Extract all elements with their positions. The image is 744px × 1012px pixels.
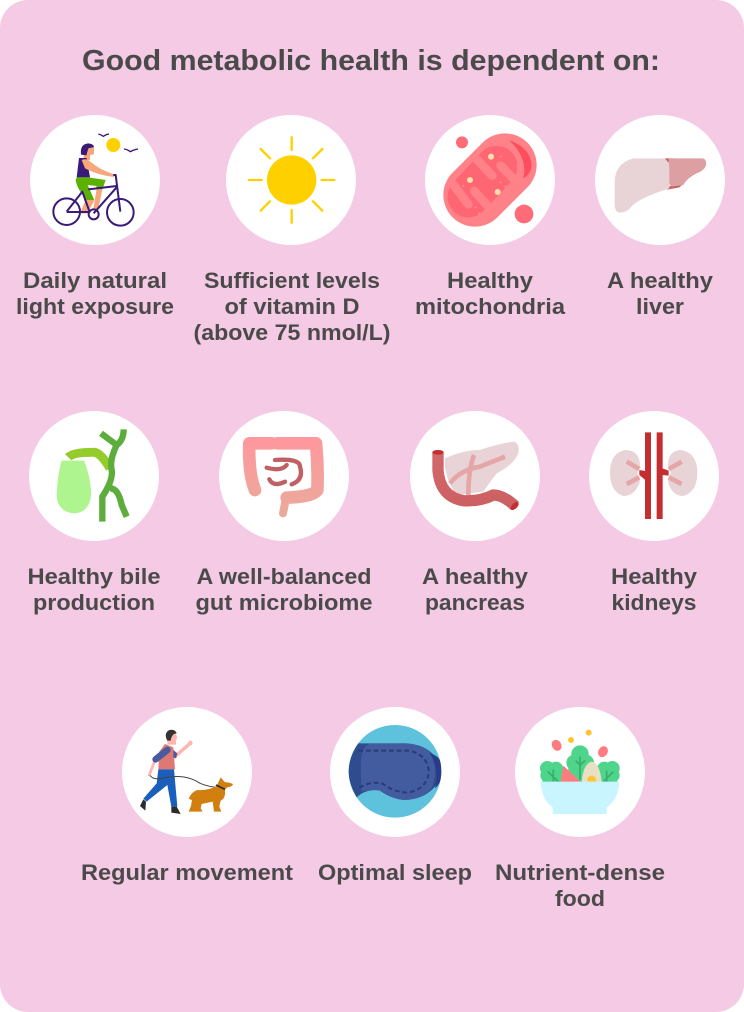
- item: gut microbiome: [196, 411, 372, 615]
- item: optimal sleep: [318, 707, 472, 885]
- label: [422, 564, 529, 615]
- label: (above 75 nmol/L): [194, 320, 390, 345]
- icon: kidneys: [589, 411, 719, 541]
- item: liver: [595, 115, 725, 319]
- item: bile production: [28, 411, 160, 615]
- label: Sufficient levels: [204, 268, 380, 293]
- icon: liver: [595, 115, 725, 245]
- label: [607, 268, 714, 319]
- item: pancreas: [410, 411, 540, 615]
- label: production: [33, 590, 155, 615]
- title: Good metabolic health is dependent on:: [82, 45, 660, 77]
- label: Healthy: [611, 564, 698, 589]
- label: kidneys: [612, 590, 696, 615]
- label: [16, 268, 174, 319]
- label: Healthy bile: [28, 564, 160, 589]
- item: mitochondria: [415, 115, 566, 319]
- label: Nutrient-dense: [495, 860, 665, 885]
- item: daily natural light exposure: [16, 115, 174, 319]
- icon: salad bowl: [515, 707, 645, 837]
- label: Optimal sleep: [318, 860, 472, 885]
- icon: intestines: [219, 411, 349, 541]
- label: food: [555, 886, 605, 911]
- icon: gallbladder and bile ducts: [29, 411, 159, 541]
- label: [611, 564, 698, 615]
- label: gut microbiome: [196, 590, 372, 615]
- item: nutrient-dense food: [495, 707, 665, 911]
- label: Healthy: [447, 268, 534, 293]
- icon: cyclist in the sun: [30, 115, 160, 245]
- label: mitochondria: [415, 294, 566, 319]
- label: A healthy: [607, 268, 714, 293]
- icon: sleep mask: [330, 707, 460, 837]
- label: pancreas: [425, 590, 525, 615]
- label: Daily natural: [23, 268, 167, 293]
- label: of vitamin D: [224, 294, 360, 319]
- label: liver: [636, 294, 684, 319]
- item: kidneys: [589, 411, 719, 615]
- icon: pancreas: [410, 411, 540, 541]
- label: A healthy: [422, 564, 529, 589]
- label: [194, 268, 390, 345]
- label: [415, 268, 566, 319]
- label: A well-balanced: [196, 564, 372, 589]
- label: [196, 564, 372, 615]
- icon: sun: [226, 115, 356, 245]
- icon: mitochondrion: [425, 115, 555, 245]
- icon: person walking a dog: [122, 707, 252, 837]
- label: Regular movement: [81, 860, 294, 885]
- item: vitamin D: [194, 115, 390, 345]
- label: [28, 564, 160, 615]
- label: light exposure: [16, 294, 174, 319]
- label: [495, 860, 665, 911]
- item: regular movement: [81, 707, 294, 885]
